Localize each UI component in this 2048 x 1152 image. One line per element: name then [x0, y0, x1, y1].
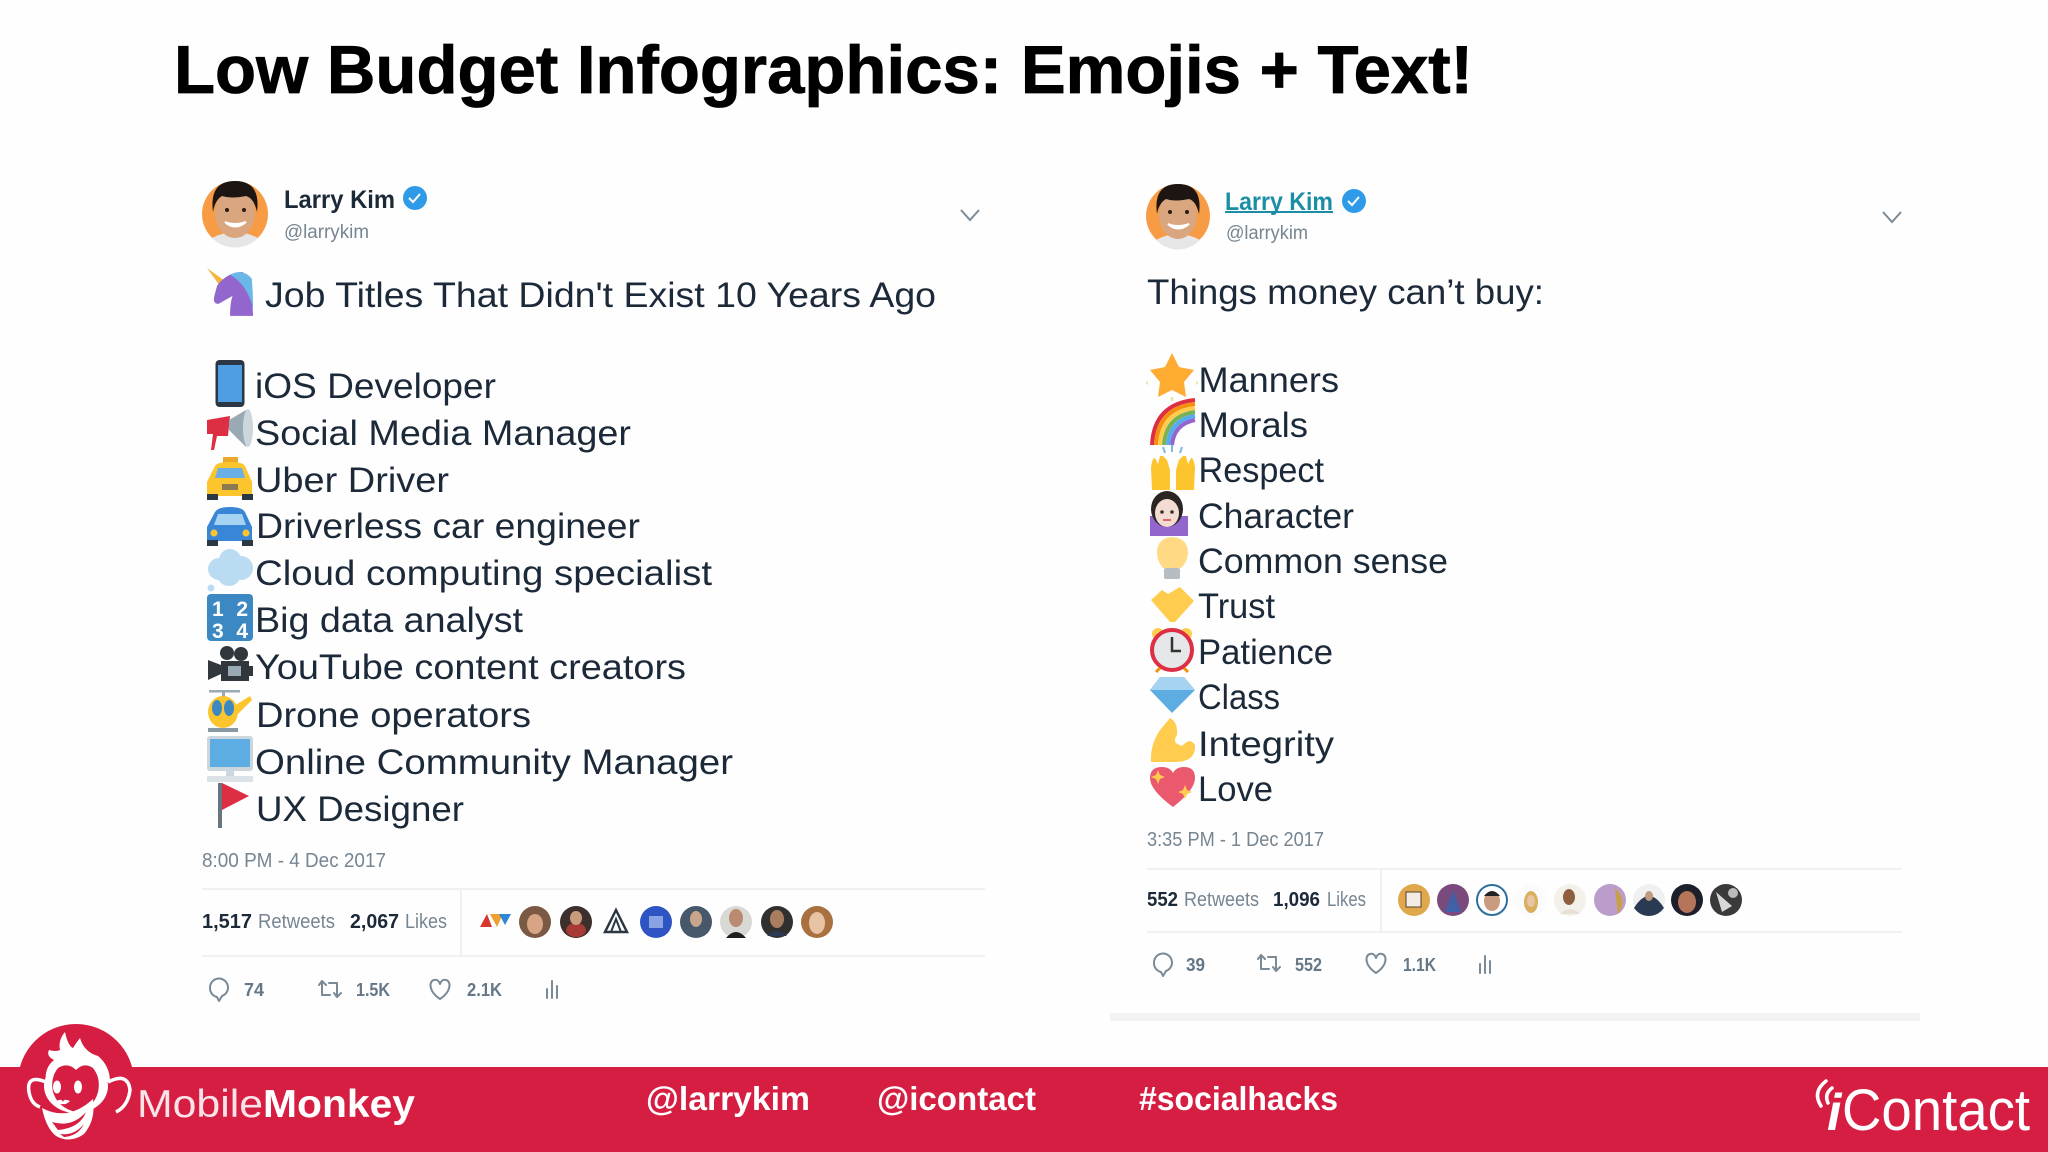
- tweet bottom border: [1110, 1013, 1920, 1021]
- label: Common sense: Common sense: [1198, 542, 1448, 581]
- author name link: Larry Kim: [1225, 188, 1333, 216]
- label: YouTube content creators: YouTube content creators: [255, 648, 686, 687]
- liker avatars: [1398, 884, 1742, 916]
- action bar: 2.1K: [467, 980, 502, 1000]
- label: Online Community Manager: Online Community Manager: [255, 743, 733, 782]
- title: Low Budget Infographics: Emojis + Text!: [174, 32, 1473, 108]
- icon: reply: [210, 979, 228, 1001]
- icon: sparkling heart: [1150, 767, 1195, 807]
- liker avatars: [480, 906, 833, 938]
- icon: verified badge: [1342, 189, 1366, 213]
- panel: things money can't buy tweet: [1110, 184, 1920, 1021]
- handle: larrykim: @larrykim: [646, 1080, 810, 1117]
- avatar: Larry Kim: [202, 181, 268, 248]
- label: Big data analyst: Big data analyst: [255, 601, 523, 640]
- icon: gem: [1150, 677, 1195, 713]
- icon: alarm clock: [1152, 628, 1192, 672]
- label: Character: Character: [1198, 497, 1354, 536]
- label: Respect: Respect: [1198, 451, 1324, 490]
- label: UX Designer: UX Designer: [256, 790, 464, 829]
- label: Morals: Morals: [1198, 406, 1308, 445]
- list: job titles: [207, 360, 733, 829]
- retweet and like counts: Retweets: [1184, 889, 1259, 911]
- action bar: [210, 979, 557, 1001]
- icon: phone: [216, 360, 244, 407]
- icon: woman shrugging: [1150, 491, 1188, 536]
- label: Social Media Manager: Social Media Manager: [255, 414, 631, 453]
- logo: MobileMonkey: [18, 1024, 415, 1140]
- timestamp: 8:00 PM - 4 Dec 2017: [202, 850, 386, 872]
- icon: light bulb: [1157, 537, 1188, 579]
- avatar: Larry Kim: [1146, 184, 1210, 250]
- handle: icontact: @icontact: [877, 1080, 1036, 1117]
- icon: rainbow: [1152, 400, 1195, 445]
- label: Love: Love: [1198, 770, 1273, 809]
- icon: unicorn: [207, 268, 253, 316]
- label: Manners: Manners: [1198, 361, 1339, 400]
- label: Uber Driver: Uber Driver: [255, 461, 449, 500]
- label: Cloud computing specialist: Cloud computing specialist: [255, 554, 712, 593]
- icon: glowing star: [1146, 353, 1198, 401]
- action bar: 552: [1295, 955, 1322, 975]
- icon: verified badge: [403, 186, 427, 210]
- author name: Larry Kim: [284, 186, 395, 214]
- wordmark: Mobile: [137, 1083, 263, 1126]
- hashtag: socialhacks: #socialhacks: [1139, 1080, 1338, 1117]
- icon: cloud: [208, 549, 253, 592]
- tweet headline: Job Titles That Didn't Exist 10 Years Ago: [265, 276, 936, 315]
- tweet headline: Things money can’t buy:: [1147, 273, 1544, 312]
- icon: number keys: 12: [212, 598, 248, 621]
- label: Integrity: Integrity: [1198, 725, 1335, 764]
- retweet and like counts: Likes: [1327, 889, 1366, 911]
- action bar: 1.1K: [1403, 955, 1436, 975]
- icon: movie camera: [208, 646, 253, 681]
- handle: @larrykim: [1226, 223, 1308, 244]
- retweet and like counts: [1147, 889, 1366, 911]
- icon: flag: [218, 783, 249, 828]
- icon: reply: [1154, 954, 1172, 976]
- icon: analytics: [1480, 956, 1490, 973]
- label: Class: Class: [1198, 678, 1280, 717]
- icon: analytics: [547, 981, 557, 998]
- icon: raised hands: [1151, 445, 1195, 490]
- list: things money can't buy: [1146, 353, 1448, 809]
- label: Driverless car engineer: Driverless car engineer: [256, 507, 640, 546]
- icon: number keys: [207, 594, 253, 643]
- retweet and like counts: Retweets: [258, 911, 335, 933]
- icon: megaphone: [207, 409, 253, 450]
- retweet and like counts: [202, 911, 447, 933]
- panel: job titles tweet: [202, 181, 985, 1001]
- icon: chevron: [961, 210, 979, 220]
- label: Drone operators: Drone operators: [256, 696, 531, 735]
- icon: desktop computer: [207, 736, 253, 782]
- icon: like: [1366, 954, 1386, 973]
- retweet and like counts: 2,067: [350, 911, 399, 933]
- logo: MobileMonkey: Monkey: [263, 1083, 415, 1126]
- label: Trust: Trust: [1198, 587, 1275, 626]
- logo: iContact: i: [1827, 1084, 1843, 1142]
- action bar: 39: [1186, 955, 1205, 975]
- icon: monkey: [18, 1024, 134, 1140]
- icon: like: [430, 980, 450, 999]
- icon: handshake: [1151, 587, 1194, 622]
- icon: number keys: 34: [212, 620, 248, 643]
- icon: taxi: [207, 457, 253, 500]
- footer bar: [0, 1024, 2048, 1152]
- retweet and like counts: 1,517: [202, 911, 252, 933]
- icon: blue car: [207, 507, 253, 546]
- handle: @larrykim: [284, 222, 369, 243]
- icon: retweet: [319, 981, 341, 997]
- logo: iContact: Contact: [1842, 1078, 2030, 1143]
- retweet and like counts: 1,096: [1273, 889, 1320, 911]
- action bar: 1.5K: [356, 980, 390, 1000]
- timestamp: 3:35 PM - 1 Dec 2017: [1147, 829, 1324, 851]
- icon: retweet: [1258, 955, 1280, 971]
- icon: helicopter: [208, 690, 252, 732]
- icon: chevron: [1883, 212, 1901, 222]
- icon: flexed biceps: [1151, 718, 1195, 762]
- action bar: 74: [244, 980, 264, 1000]
- label: iOS Developer: iOS Developer: [255, 367, 496, 406]
- label: Patience: Patience: [1198, 633, 1333, 672]
- retweet and like counts: Likes: [405, 911, 447, 933]
- retweet and like counts: 552: [1147, 889, 1178, 911]
- action bar: [1154, 954, 1490, 976]
